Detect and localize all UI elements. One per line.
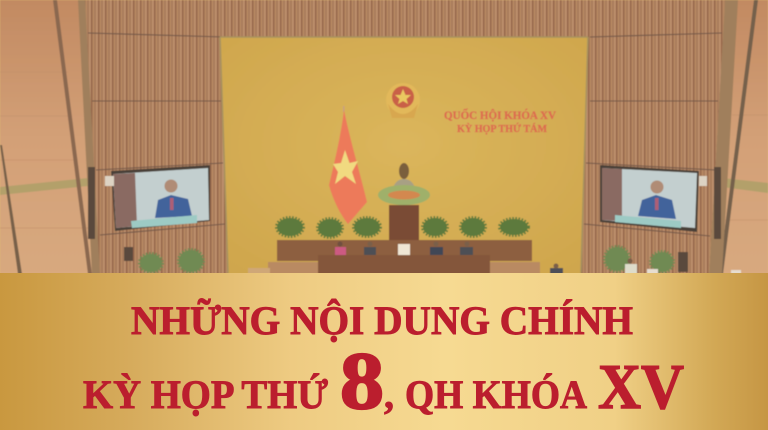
left side wall <box>0 0 100 274</box>
right side wall <box>712 0 768 274</box>
potted plants <box>140 218 673 272</box>
title line 2: 8 <box>340 335 384 426</box>
flag of Vietnam <box>329 106 367 224</box>
wall inscription: QUỐC HỘI KHÓA XV <box>444 107 556 122</box>
right video screen <box>600 165 699 232</box>
title line 2: QH KHÓA <box>405 372 587 417</box>
title line 2: KỲ HỌP THỨ <box>83 372 328 417</box>
delegates <box>335 242 741 274</box>
title band <box>0 273 768 430</box>
title <box>83 298 684 426</box>
wall inscription <box>444 107 556 135</box>
title line 2: XV <box>598 351 684 422</box>
photo: assembly hall <box>0 0 768 274</box>
title line 2 <box>83 335 684 426</box>
camera and speakers <box>88 167 721 272</box>
wood wall panels <box>85 0 725 274</box>
side trim strips <box>78 0 738 274</box>
wall inscription: KỲ HỌP THỨ TÁM <box>457 123 547 135</box>
national emblem <box>386 83 420 118</box>
presidium desks <box>248 240 540 274</box>
bust on plinth <box>378 163 430 255</box>
title line 2: , <box>384 372 394 417</box>
gold backdrop <box>220 37 588 274</box>
title line 1: NHỮNG NỘI DUNG CHÍNH <box>131 298 633 343</box>
left video screen <box>111 165 210 231</box>
